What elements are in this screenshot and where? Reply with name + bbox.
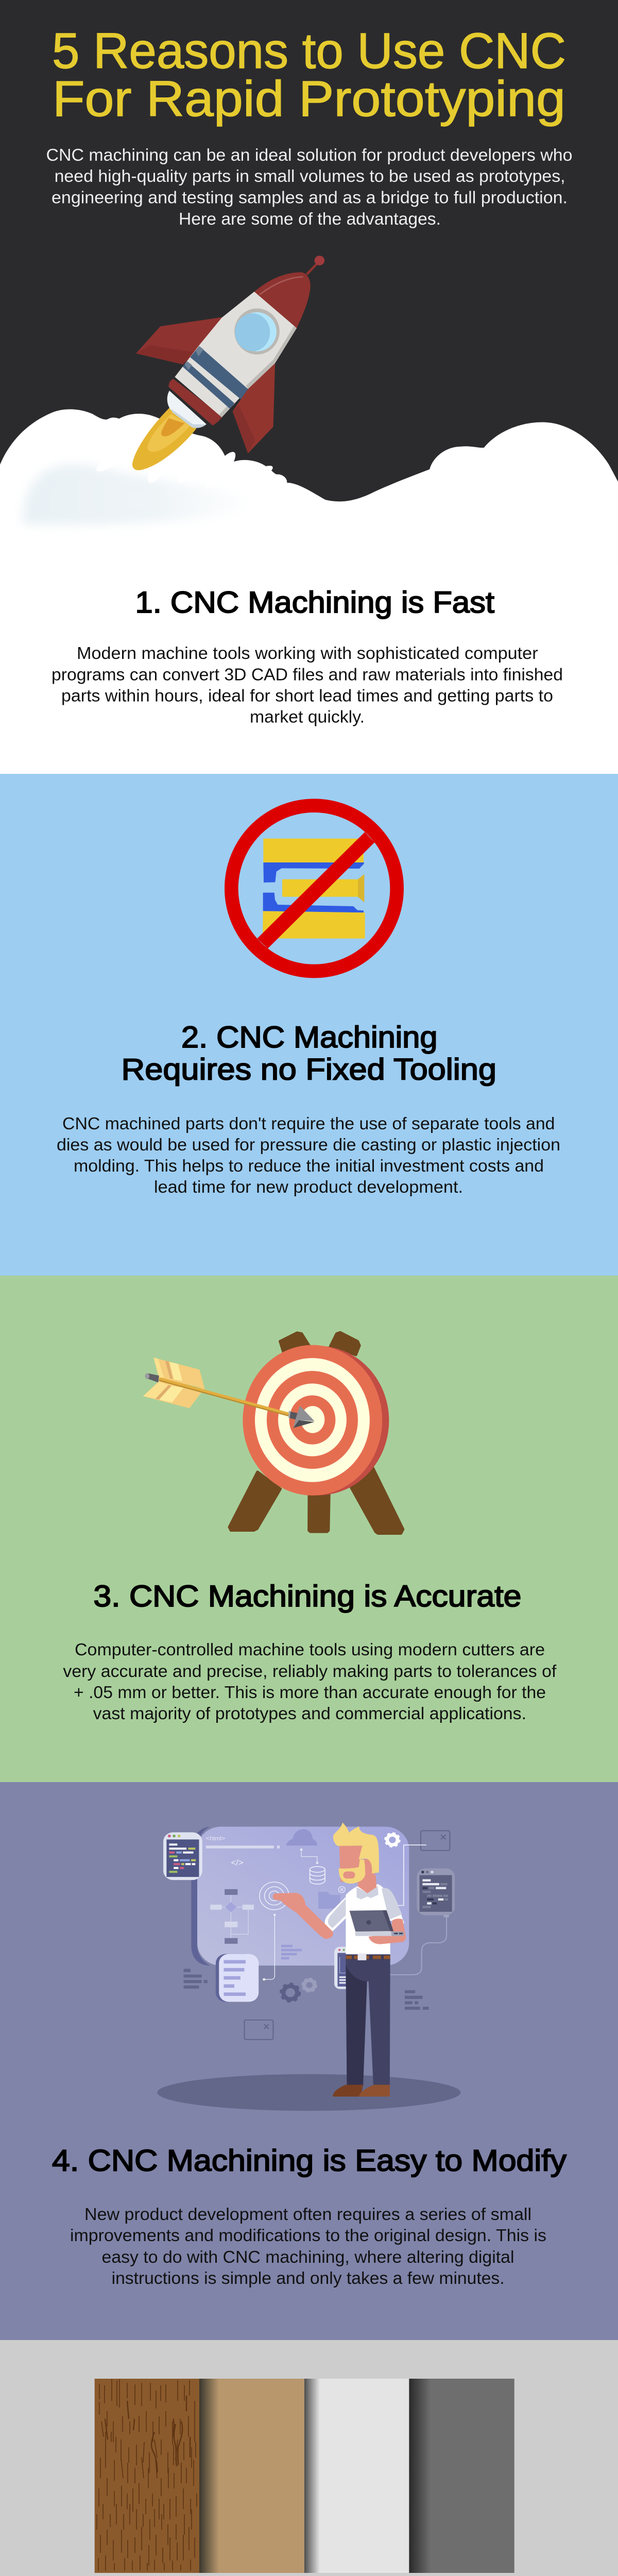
closed box top right	[421, 1831, 450, 1851]
title	[52, 23, 566, 127]
text block 2: CNC machined parts don't require the use of separate tools and	[62, 1114, 555, 1133]
window	[234, 309, 280, 354]
screen widgets: </>	[231, 1858, 244, 1867]
intro text: need high-quality parts in small volumes to be used as prototypes,	[55, 166, 565, 185]
person	[273, 1823, 406, 2096]
holding arm	[369, 1919, 406, 1944]
cloud plumes	[93, 439, 276, 492]
right code window	[417, 1869, 455, 1917]
left fin	[136, 317, 225, 364]
shoes	[333, 2084, 390, 2096]
text block 3: + .05 mm or better. This is more than accurate enough for the	[74, 1683, 546, 1702]
cloud haze	[23, 464, 254, 525]
intro text: Here are some of the advantages.	[179, 209, 441, 228]
screen widgets: <html>	[206, 1835, 225, 1842]
grey swatch	[409, 2379, 514, 2573]
collar	[168, 379, 222, 426]
material swatches	[95, 2379, 514, 2573]
heading 1: 1. CNC Machining is Fast	[135, 586, 494, 619]
text block 1	[52, 643, 563, 726]
text block 2: lead time for new product development.	[154, 1177, 463, 1196]
text block 4	[70, 2205, 546, 2287]
disc	[243, 1345, 389, 1496]
belt	[346, 1954, 390, 1960]
text block 3: Computer-controlled machine tools using modern cutters are	[75, 1640, 545, 1659]
right sleeve	[382, 1888, 404, 1923]
right fin	[233, 363, 275, 453]
intro text	[46, 145, 573, 228]
text block 2: dies as would be used for pressure die casting or plastic injection	[57, 1135, 560, 1154]
wood swatch	[95, 2379, 199, 2573]
text block 4: New product development often requires a series of small	[84, 2205, 531, 2224]
text block 4: easy to do with CNC machining, where altering digital	[102, 2247, 514, 2266]
intro text: CNC machining can be an ideal solution for product developers who	[46, 145, 573, 164]
text block 1: Modern machine tools working with sophisticated computer	[77, 643, 538, 663]
gears	[281, 1978, 316, 2002]
heading 2: Requires no Fixed Tooling	[122, 1053, 496, 1086]
text block 3	[63, 1640, 557, 1723]
document panel	[216, 1954, 259, 2002]
text block 4: improvements and modifications to the original design. This is	[70, 2226, 546, 2245]
title: 5 Reasons to Use CNC	[52, 23, 566, 79]
small window behind person	[334, 1947, 354, 1989]
left sleeve	[325, 1897, 346, 1931]
small text bars left	[184, 1969, 208, 1989]
mold	[263, 839, 365, 939]
shirt	[346, 1884, 390, 1954]
cloud	[0, 409, 618, 567]
intro text: engineering and testing samples and as a bridge to full production.	[52, 188, 568, 207]
stripes	[182, 346, 248, 409]
heading 4: 4. CNC Machining is Easy to Modify	[52, 2144, 566, 2177]
trousers	[346, 1959, 390, 2086]
icon: engineer with digital interface	[157, 1823, 460, 2111]
text block 3: vast majority of prototypes and commercial applications.	[93, 1704, 526, 1723]
arrow fletching	[143, 1358, 204, 1408]
heading 2	[122, 1021, 496, 1086]
text block 1: market quickly.	[250, 707, 365, 726]
screen	[191, 1826, 409, 1965]
panel: reason 5	[0, 2340, 618, 2576]
arrow nock	[145, 1373, 159, 1382]
floor shadow	[157, 2074, 460, 2111]
easel legs	[229, 1332, 403, 1534]
icon: rocket	[132, 256, 324, 470]
prohibition sign	[231, 806, 397, 971]
text block 2	[57, 1114, 560, 1196]
panel: reason 3	[0, 1276, 618, 1782]
tan swatch	[199, 2379, 304, 2573]
nozzle	[167, 391, 207, 428]
neck	[358, 1874, 376, 1893]
arrow head	[288, 1405, 315, 1428]
body	[175, 292, 297, 417]
antenna	[306, 256, 324, 275]
panel: reason 2	[0, 774, 618, 1276]
heading 2: 2. CNC Machining	[181, 1021, 438, 1054]
arrow shaft	[159, 1379, 289, 1416]
text block 1: parts within hours, ideal for short lead times and getting parts to	[61, 686, 553, 705]
closed box bottom	[244, 2020, 273, 2040]
nose cone	[254, 272, 311, 328]
head	[333, 1823, 379, 1884]
collar	[356, 1886, 379, 1900]
panel: reason 1	[0, 567, 618, 774]
tablet	[350, 1910, 404, 1936]
screen widgets	[206, 1829, 400, 1959]
pointing arm	[273, 1893, 333, 1939]
text block 1: programs can convert 3D CAD files and raw materials into finished	[52, 665, 563, 684]
body lower shadow	[219, 406, 230, 417]
flame	[132, 408, 196, 470]
connector	[263, 1914, 276, 1980]
panel: intro	[0, 0, 618, 567]
cable lines	[389, 1845, 447, 1975]
heading 3: 3. CNC Machining is Accurate	[93, 1580, 521, 1613]
icon: no tooling	[231, 806, 397, 971]
title: For Rapid Prototyping	[53, 71, 565, 127]
text block 4: instructions is simple and only takes a few minutes.	[112, 2268, 505, 2287]
light swatch	[304, 2379, 409, 2573]
left code window	[163, 1833, 202, 1880]
panel: reason 4	[0, 1782, 618, 2340]
text block 2: molding. This helps to reduce the initial investment costs and	[74, 1156, 544, 1175]
small text bars right	[405, 1990, 429, 2010]
body shadow	[246, 326, 297, 389]
icon: target and arrow	[143, 1332, 403, 1534]
text block 3: very accurate and precise, reliably making parts to tolerances of	[63, 1662, 557, 1681]
